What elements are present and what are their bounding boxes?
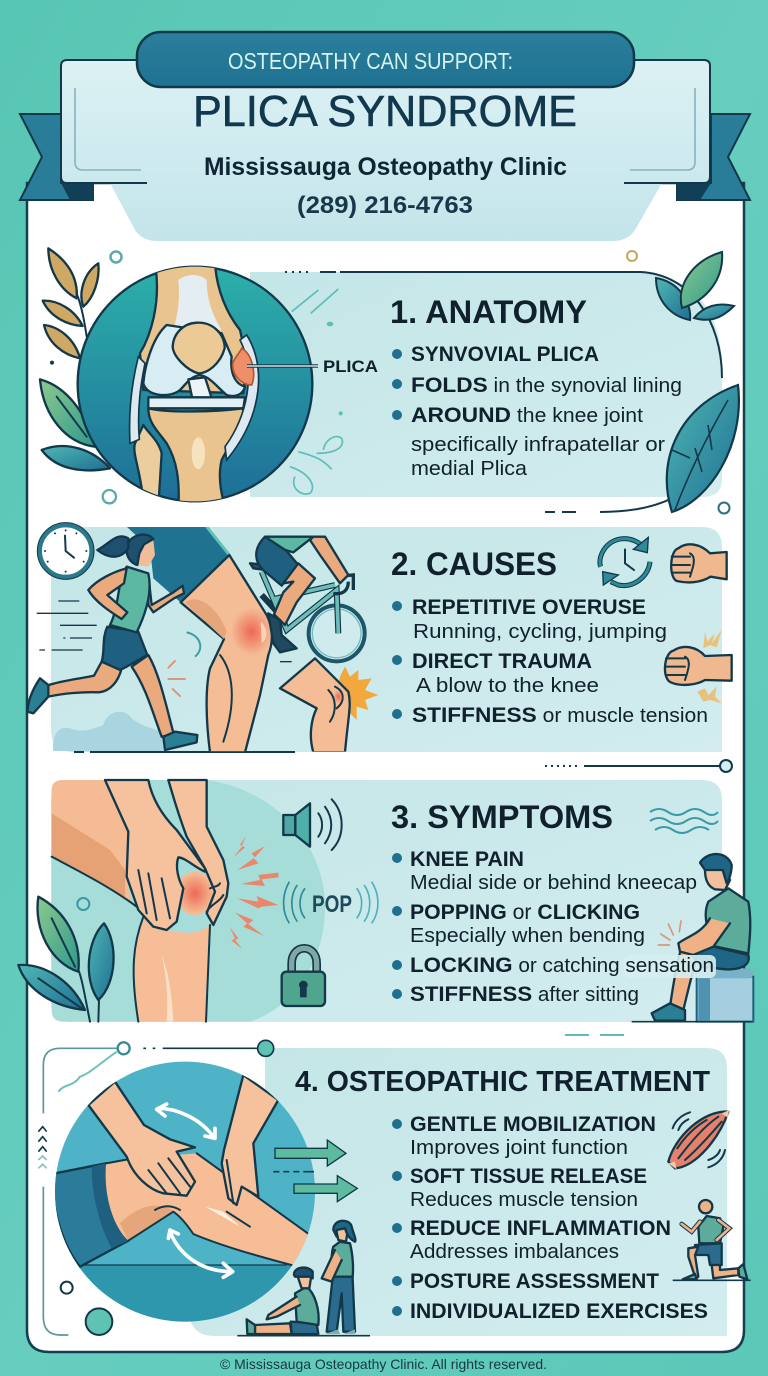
icon: speaker bbox=[283, 799, 342, 850]
icon: muscle bbox=[668, 1110, 729, 1169]
causes bullets: REPETITIVE OVERUSE bbox=[412, 595, 646, 619]
treatment bullets: SOFT TISSUE RELEASE bbox=[410, 1164, 647, 1188]
hand left bbox=[88, 1082, 195, 1196]
decorative swirls bbox=[290, 289, 342, 494]
corner bracket bbox=[38, 1040, 274, 1335]
panel: treatment bbox=[38, 1040, 751, 1336]
symptoms bullets: Especially when bending bbox=[410, 925, 645, 947]
ribbon left bbox=[20, 114, 93, 200]
shorts bbox=[52, 1163, 128, 1267]
clock bbox=[37, 523, 94, 579]
symptoms bullets: KNEE PAIN bbox=[410, 847, 524, 871]
teal backdrop bbox=[52, 780, 325, 1022]
knee joint bbox=[130, 263, 259, 508]
anatomy bullets: SYNVOVIAL PLICA bbox=[411, 342, 599, 366]
causes bullets: DIRECT TRAUMA bbox=[412, 649, 592, 673]
treatment heading: 4. OSTEOPATHIC TREATMENT bbox=[295, 1066, 710, 1098]
seated man bbox=[632, 854, 753, 1022]
treatment bullets: GENTLE MOBILIZATION bbox=[410, 1112, 656, 1136]
decorative connector lines bbox=[285, 272, 722, 512]
symptoms illustration bbox=[18, 780, 378, 1022]
gold branch bbox=[43, 248, 99, 358]
treatment circle bbox=[55, 1062, 315, 1322]
symptoms bullets: LOCKING or catching sensation bbox=[410, 953, 714, 977]
cloud bbox=[53, 712, 163, 751]
anatomy bullets: FOLDS in the synovial lining bbox=[411, 373, 682, 397]
causes background bbox=[51, 527, 722, 752]
white motion arrows bbox=[157, 1104, 233, 1277]
header plate bbox=[61, 60, 710, 241]
clinic name: Mississauga Osteopathy Clinic bbox=[204, 153, 567, 181]
symptoms bullets: STIFFNESS after sitting bbox=[410, 982, 639, 1006]
plica label bbox=[247, 358, 378, 376]
practitioner and patient bbox=[237, 1221, 370, 1336]
phone: (289) 216-4763 bbox=[297, 192, 473, 219]
treatment bullets: Reduces muscle tension bbox=[410, 1189, 638, 1211]
icon: lock bbox=[282, 948, 325, 1006]
anatomy illustration bbox=[40, 248, 343, 508]
pill: osteopathy can support bbox=[137, 32, 634, 87]
cyclist bbox=[250, 537, 365, 662]
treatment bullets: REDUCE INFLAMMATION bbox=[410, 1216, 671, 1240]
leg bbox=[106, 1153, 313, 1267]
anatomy bullets: AROUND the knee joint bbox=[411, 403, 643, 427]
knee circle bbox=[78, 267, 312, 501]
motion marks bbox=[168, 661, 185, 696]
causes bullets: STIFFNESS or muscle tension bbox=[412, 703, 708, 727]
big teal leaf bbox=[667, 385, 739, 512]
icon: kneeling exerciser bbox=[673, 1200, 751, 1280]
treatment background bbox=[190, 1048, 727, 1336]
symptoms bullets: Medial side or behind kneecap bbox=[410, 872, 697, 894]
thigh bbox=[52, 780, 132, 902]
symptoms background bbox=[51, 780, 722, 1022]
leaves bbox=[18, 897, 114, 1022]
lower leg bbox=[134, 917, 210, 1022]
treatment bullets bbox=[392, 1112, 708, 1323]
ribbon right bbox=[677, 114, 750, 200]
symptoms bullets: POPPING or CLICKING bbox=[410, 900, 640, 924]
footer copyright: © Mississauga Osteopathy Clinic. All rights reserved. bbox=[220, 1356, 547, 1372]
hand right bbox=[222, 1075, 278, 1205]
water waves icon bbox=[650, 809, 718, 833]
icon: circular clock bbox=[600, 537, 650, 586]
big knee bbox=[127, 527, 272, 752]
small knee impact bbox=[280, 658, 378, 752]
panel: symptoms bbox=[18, 780, 753, 1035]
causes heading: 2. CAUSES bbox=[391, 546, 557, 582]
treatment bullets: Addresses imbalances bbox=[410, 1241, 619, 1263]
symptoms bullets bbox=[392, 847, 716, 1006]
title: PLICA SYNDROME bbox=[193, 87, 577, 136]
anatomy background bbox=[250, 272, 722, 497]
treatment illustration bbox=[38, 1040, 370, 1336]
panel: anatomy bbox=[40, 248, 739, 514]
hands bbox=[168, 780, 228, 925]
treatment bullets: POSTURE ASSESSMENT bbox=[410, 1269, 659, 1293]
panel: causes bbox=[27, 523, 732, 772]
anatomy bullets: medial Plica bbox=[411, 458, 528, 480]
pain bolts bbox=[229, 836, 278, 949]
causes bullets: Running, cycling, jumping bbox=[413, 621, 667, 643]
icon: pop sound waves bbox=[284, 882, 378, 923]
causes illustration bbox=[27, 523, 378, 752]
white page panel bbox=[27, 183, 744, 1352]
pop label: POP bbox=[312, 891, 352, 918]
treatment bullets: Improves joint function bbox=[410, 1137, 628, 1159]
causes bullets bbox=[392, 595, 708, 727]
anatomy bullets: specifically infrapatellar or bbox=[411, 434, 665, 456]
anatomy heading: 1. ANATOMY bbox=[390, 294, 587, 330]
speed lines bbox=[37, 601, 97, 650]
header banner bbox=[20, 32, 750, 241]
symptoms heading: 3. SYMPTOMS bbox=[391, 799, 613, 835]
knee glow bbox=[175, 872, 215, 915]
plica label: PLICA bbox=[323, 358, 378, 376]
causes bullets: A blow to the knee bbox=[416, 675, 599, 697]
treatment bullets: INDIVIDUALIZED EXERCISES bbox=[410, 1299, 708, 1323]
leaves top right bbox=[656, 252, 734, 320]
anatomy bullets bbox=[392, 342, 682, 480]
runner bbox=[27, 535, 197, 750]
green arrows bbox=[275, 1140, 357, 1202]
pill: osteopathy can support: OSTEOPATHY CAN SUPPORT: bbox=[228, 48, 513, 74]
icon: fists bbox=[665, 544, 732, 703]
green and teal leaves bbox=[40, 379, 110, 470]
